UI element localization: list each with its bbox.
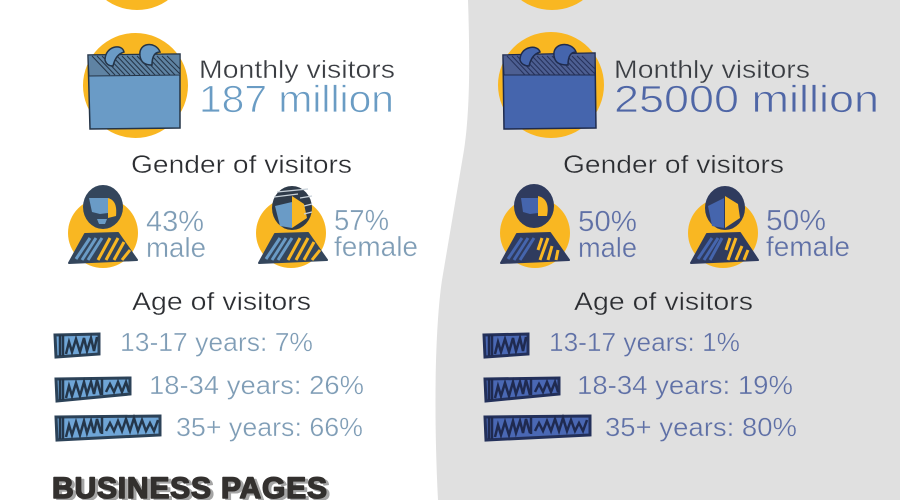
panel: right column — [484, 0, 879, 442]
heading: age of visitors: Age of visitors — [574, 288, 753, 316]
panel: right column grey background — [435, 0, 900, 500]
age row: 13-17 years: 13-17 years: 7% — [120, 327, 313, 357]
icon: calendar — [498, 32, 604, 138]
icon: female visitor — [256, 186, 327, 268]
age row: 18-34 years: 18-34 years: 26% — [149, 370, 364, 400]
male label: male — [146, 232, 206, 263]
bar: 18-34 years — [485, 378, 559, 401]
bar: 18-34 years — [56, 378, 130, 401]
age row: 35+ years: 35+ years: 66% — [176, 412, 363, 442]
bar: 35+ years — [485, 416, 590, 440]
male share value: 50% — [578, 206, 637, 238]
monthly visitors value: 187 million — [199, 79, 394, 121]
heading: gender of visitors: Gender of visitors — [563, 151, 784, 179]
icon: cropped yellow circle — [499, 0, 605, 10]
age row: 35+ years: 35+ years: 80% — [605, 412, 797, 442]
monthly visitors label: Monthly visitors — [614, 56, 810, 84]
age row: 13-17 years: 13-17 years: 1% — [549, 327, 740, 357]
icon: female visitor — [688, 186, 758, 268]
bar: 35+ years — [56, 416, 160, 440]
monthly visitors label: Monthly visitors — [199, 56, 395, 84]
bar: 13-17 years — [55, 334, 99, 357]
icon: male visitor — [500, 184, 570, 268]
heading: gender of visitors: Gender of visitors — [131, 151, 352, 179]
male share value: 43% — [146, 206, 204, 238]
panel: left column — [52, 0, 418, 500]
male label: male — [578, 232, 637, 263]
female share value: 57% — [334, 205, 389, 237]
heading: age of visitors: Age of visitors — [132, 288, 311, 316]
age row: 18-34 years: 18-34 years: 19% — [577, 370, 793, 400]
female label: female — [766, 231, 850, 262]
icon: male visitor — [68, 185, 138, 268]
female label: female — [334, 231, 418, 262]
bar: 13-17 years — [484, 334, 528, 357]
icon: calendar — [83, 33, 188, 138]
female share value: 50% — [766, 205, 826, 237]
monthly visitors value: 25000 million — [614, 79, 879, 121]
icon: cropped yellow circle — [84, 0, 190, 10]
